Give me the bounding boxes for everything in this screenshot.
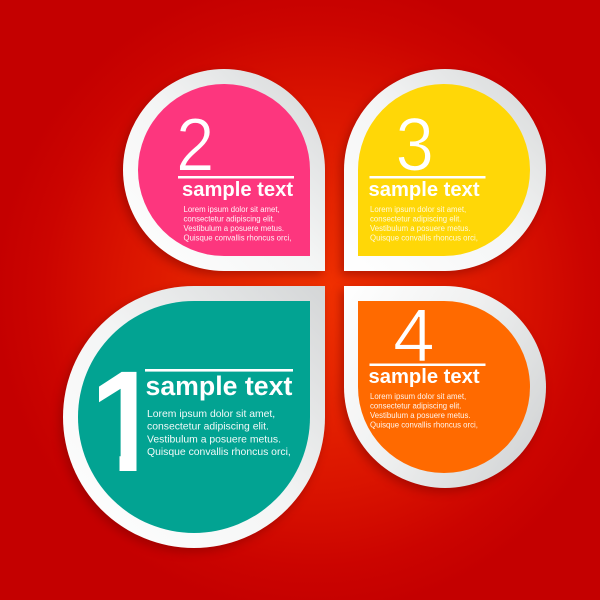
panel 4 shadow: [341, 290, 543, 492]
panel 4 fill: [358, 301, 530, 473]
panel 1 body: Quisque convallis rhoncus orci,: [147, 447, 291, 458]
panel 2 body: Vestibulum a posuere metus.: [184, 224, 284, 233]
panel 3 body: Quisque convallis rhoncus orci,: [370, 234, 478, 242]
panel 1 body: Lorem ipsum dolor sit amet,: [147, 409, 275, 420]
panel 2 body: consectetur adipiscing elit.: [184, 214, 275, 224]
panel 3 shadow: [341, 73, 543, 275]
panel 1 rule: [145, 369, 293, 372]
panel 3 body: Vestibulum a posuere metus.: [370, 224, 471, 233]
panel 3 ring: [344, 69, 546, 271]
panel 1 heading: sample text: [146, 371, 292, 401]
panel 1 ring: [63, 286, 325, 548]
panel 2 rule: [178, 176, 294, 178]
panel 1 body: consectetur adipiscing elit.: [147, 422, 269, 433]
panel 2 shadow: [120, 73, 322, 275]
panel 3 heading: sample text: [368, 179, 480, 201]
panel 4 body: Lorem ipsum dolor sit amet,: [370, 392, 466, 401]
number 3: 3: [396, 104, 434, 187]
panel 2 body: Quisque convallis rhoncus orci,: [184, 234, 291, 242]
panel 3 fill: [358, 84, 530, 256]
panel 4 body: Vestibulum a posuere metus.: [370, 411, 471, 420]
number 1: 1: [87, 341, 167, 502]
panel 1: teal: [60, 286, 325, 552]
panel 2 heading: sample text: [182, 179, 293, 201]
number 4: 4: [393, 293, 435, 377]
panel 2 body: Lorem ipsum dolor sit amet,: [184, 205, 280, 214]
panel 4 body: consectetur adipiscing elit.: [370, 402, 461, 410]
panel 4 rule: [370, 364, 486, 366]
number 2: 2: [176, 104, 214, 187]
panel 2 fill: [138, 84, 310, 256]
panel 1 body: Vestibulum a posuere metus.: [147, 434, 281, 445]
panel 4 body: Quisque convallis rhoncus orci,: [370, 420, 478, 430]
panel 3 body: Lorem ipsum dolor sit amet,: [370, 205, 466, 214]
panel 4: orange: [341, 286, 546, 492]
panel 3 body: consectetur adipiscing elit.: [370, 214, 461, 224]
panel 1 fill: [78, 301, 310, 533]
panel 2: pink: [120, 69, 325, 275]
panel 3: yellow: [341, 69, 546, 275]
panel 4 ring: [344, 286, 546, 488]
panel 2 ring: [123, 69, 325, 271]
panel 3 rule: [370, 176, 486, 178]
panel 1 shadow: [60, 290, 322, 552]
panel 4 heading: sample text: [368, 366, 480, 388]
